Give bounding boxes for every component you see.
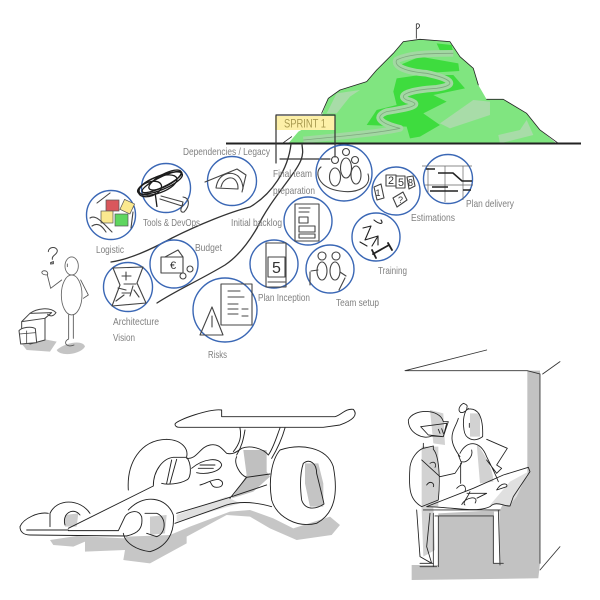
milestone: dependencies / legacy xyxy=(183,146,271,206)
rear wing xyxy=(175,409,355,427)
milestone: estimations: ? xyxy=(398,195,403,205)
milestone: risks xyxy=(193,278,257,361)
car shadows xyxy=(50,510,340,563)
boxes xyxy=(19,309,56,344)
milestone: architecture vision xyxy=(104,262,159,344)
milestone: final team preparation: Final team xyxy=(273,168,312,180)
milestone: tools and devops: Tools & DevOps xyxy=(143,217,200,229)
stick figure xyxy=(42,257,88,346)
milestone: team setup: Team setup xyxy=(336,297,379,309)
milestone: logistic xyxy=(86,190,136,256)
person with question mark and boxes xyxy=(19,248,88,354)
milestone: estimations: 5 xyxy=(398,177,404,189)
milestone: estimations: Estimations xyxy=(411,212,455,224)
wing struts xyxy=(233,428,285,458)
milestone: plan delivery: Plan delivery xyxy=(466,198,515,210)
milestone: estimations xyxy=(372,167,455,224)
rear tyre xyxy=(270,447,335,524)
milestone: team setup xyxy=(306,245,379,309)
question mark xyxy=(48,248,57,264)
sprint 1 flag xyxy=(275,115,335,163)
table top plan xyxy=(427,467,530,510)
race car xyxy=(20,409,355,563)
milestone: plan inception: 5 xyxy=(272,260,281,277)
milestone: architecture vision: Vision xyxy=(113,332,135,344)
front wheels and nose xyxy=(20,499,174,552)
milestone: plan inception: Plan Inception xyxy=(258,292,310,304)
mechanic and racing driver in a box xyxy=(405,350,560,580)
sprint 1 flag: SPRINT 1 xyxy=(284,118,326,130)
milestone: training: Training xyxy=(378,265,407,277)
milestone: dependencies / legacy: Dependencies / Legacy xyxy=(183,146,271,158)
milestone: estimations: 1 xyxy=(376,188,381,198)
driver xyxy=(408,411,462,563)
body xyxy=(68,439,272,528)
milestone: initial backlog xyxy=(231,197,332,245)
mountain with winding road xyxy=(283,24,558,143)
path line to sprint, lower xyxy=(157,144,303,303)
table xyxy=(420,510,503,567)
milestone: initial backlog: Initial backlog xyxy=(231,217,282,229)
milestone: final team preparation: preparation xyxy=(273,185,315,197)
box shading xyxy=(412,371,540,580)
milestone: plan inception xyxy=(250,240,310,304)
milestone: training xyxy=(352,213,407,277)
ground line xyxy=(226,142,581,144)
milestone: final team preparation xyxy=(273,145,372,201)
milestone: budget: € xyxy=(170,260,176,272)
milestone: budget xyxy=(150,240,222,288)
milestone: risks: Risks xyxy=(208,349,227,361)
box frame xyxy=(405,350,560,570)
milestone: estimations: 2 xyxy=(388,175,394,187)
milestone: logistic: Logistic xyxy=(96,244,124,256)
milestone: tools and devops xyxy=(135,164,200,229)
milestone: plan delivery xyxy=(422,154,515,210)
milestone: estimations: 8 xyxy=(408,178,413,189)
floor shadows xyxy=(20,338,85,354)
path line to sprint, upper xyxy=(111,144,291,262)
milestone: budget: Budget xyxy=(195,242,222,254)
milestone: architecture vision: Architecture xyxy=(113,316,159,328)
mechanic xyxy=(452,403,507,505)
